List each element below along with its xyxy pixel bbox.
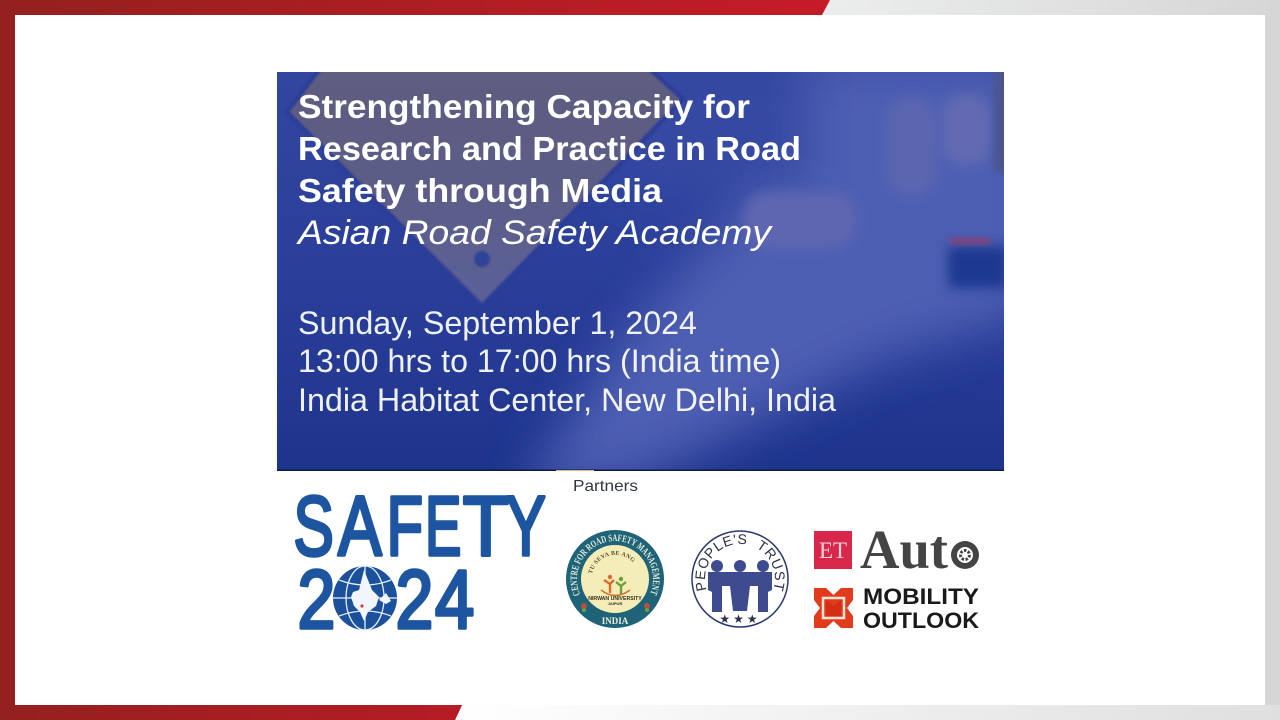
icon: university figures [601, 575, 630, 596]
logo: Mobility Outlook: OUTLOOK [863, 608, 979, 633]
logo: Safety 2024: Y [506, 480, 546, 573]
event details: 13:00 hrs to 17:00 hrs (India time) [298, 343, 781, 379]
logo: Centre for Road Safety Management: INDIA [602, 616, 629, 626]
logo: Safety 2024: 2 [298, 554, 335, 647]
icon: globe with India map [333, 566, 397, 630]
event details [298, 305, 837, 418]
logo: People's Trust [691, 530, 789, 628]
panel: event banner [277, 72, 1004, 471]
logo: Mobility Outlook: MOBILITY [863, 584, 979, 609]
event details: Sunday, September 1, 2024 [298, 305, 697, 341]
logo: Safety 2024: F [387, 480, 423, 573]
logo: Safety 2024: 2 [396, 554, 433, 647]
logo: Centre for Road Safety Management [566, 530, 664, 628]
road sign diamond [287, 66, 683, 306]
heading: Research and Practice in Road [298, 131, 801, 168]
logo: ET Auto: ET [819, 538, 847, 563]
logo: Centre for Road Safety Management: TU SEVA BE ANG [588, 550, 635, 574]
icon: tyre [951, 541, 979, 569]
logo: Safety 2024: A [338, 479, 382, 573]
logo: Centre for Road Safety Management: JAIPUR [608, 601, 622, 606]
logo: People's Trust: ★★★ [719, 612, 761, 626]
event details: India Habitat Center, New Delhi, India [298, 382, 837, 418]
heading: Safety through Media [298, 173, 662, 210]
logo: Safety 2024: T [463, 479, 509, 573]
heading: Strengthening Capacity for [298, 89, 750, 126]
logo: Safety 2024: S [294, 479, 334, 573]
logo: Centre for Road Safety Management: CENTRE FOR ROAD SAFETY MANAGEMENT [570, 534, 660, 596]
partners label: Partners [573, 478, 638, 495]
logo: Safety 2024: E [425, 480, 461, 574]
heading [298, 89, 801, 210]
logo: Mobility Outlook [814, 584, 979, 633]
logo: Safety 2024 [294, 479, 546, 647]
subheading: Asian Road Safety Academy [296, 214, 773, 252]
logo: ET Auto [814, 519, 979, 580]
logo: Safety 2024: 4 [435, 554, 474, 646]
icon: three people [708, 560, 772, 612]
banner background with blurred road sign [277, 72, 1004, 471]
logo: ET Auto: Aut [860, 519, 949, 580]
logo: People's Trust: PEOPLE'S TRUST [695, 534, 785, 592]
logo: Centre for Road Safety Management: NIRWAN UNIVERSITY [588, 596, 642, 602]
icon: Mobility Outlook mark [814, 588, 853, 628]
